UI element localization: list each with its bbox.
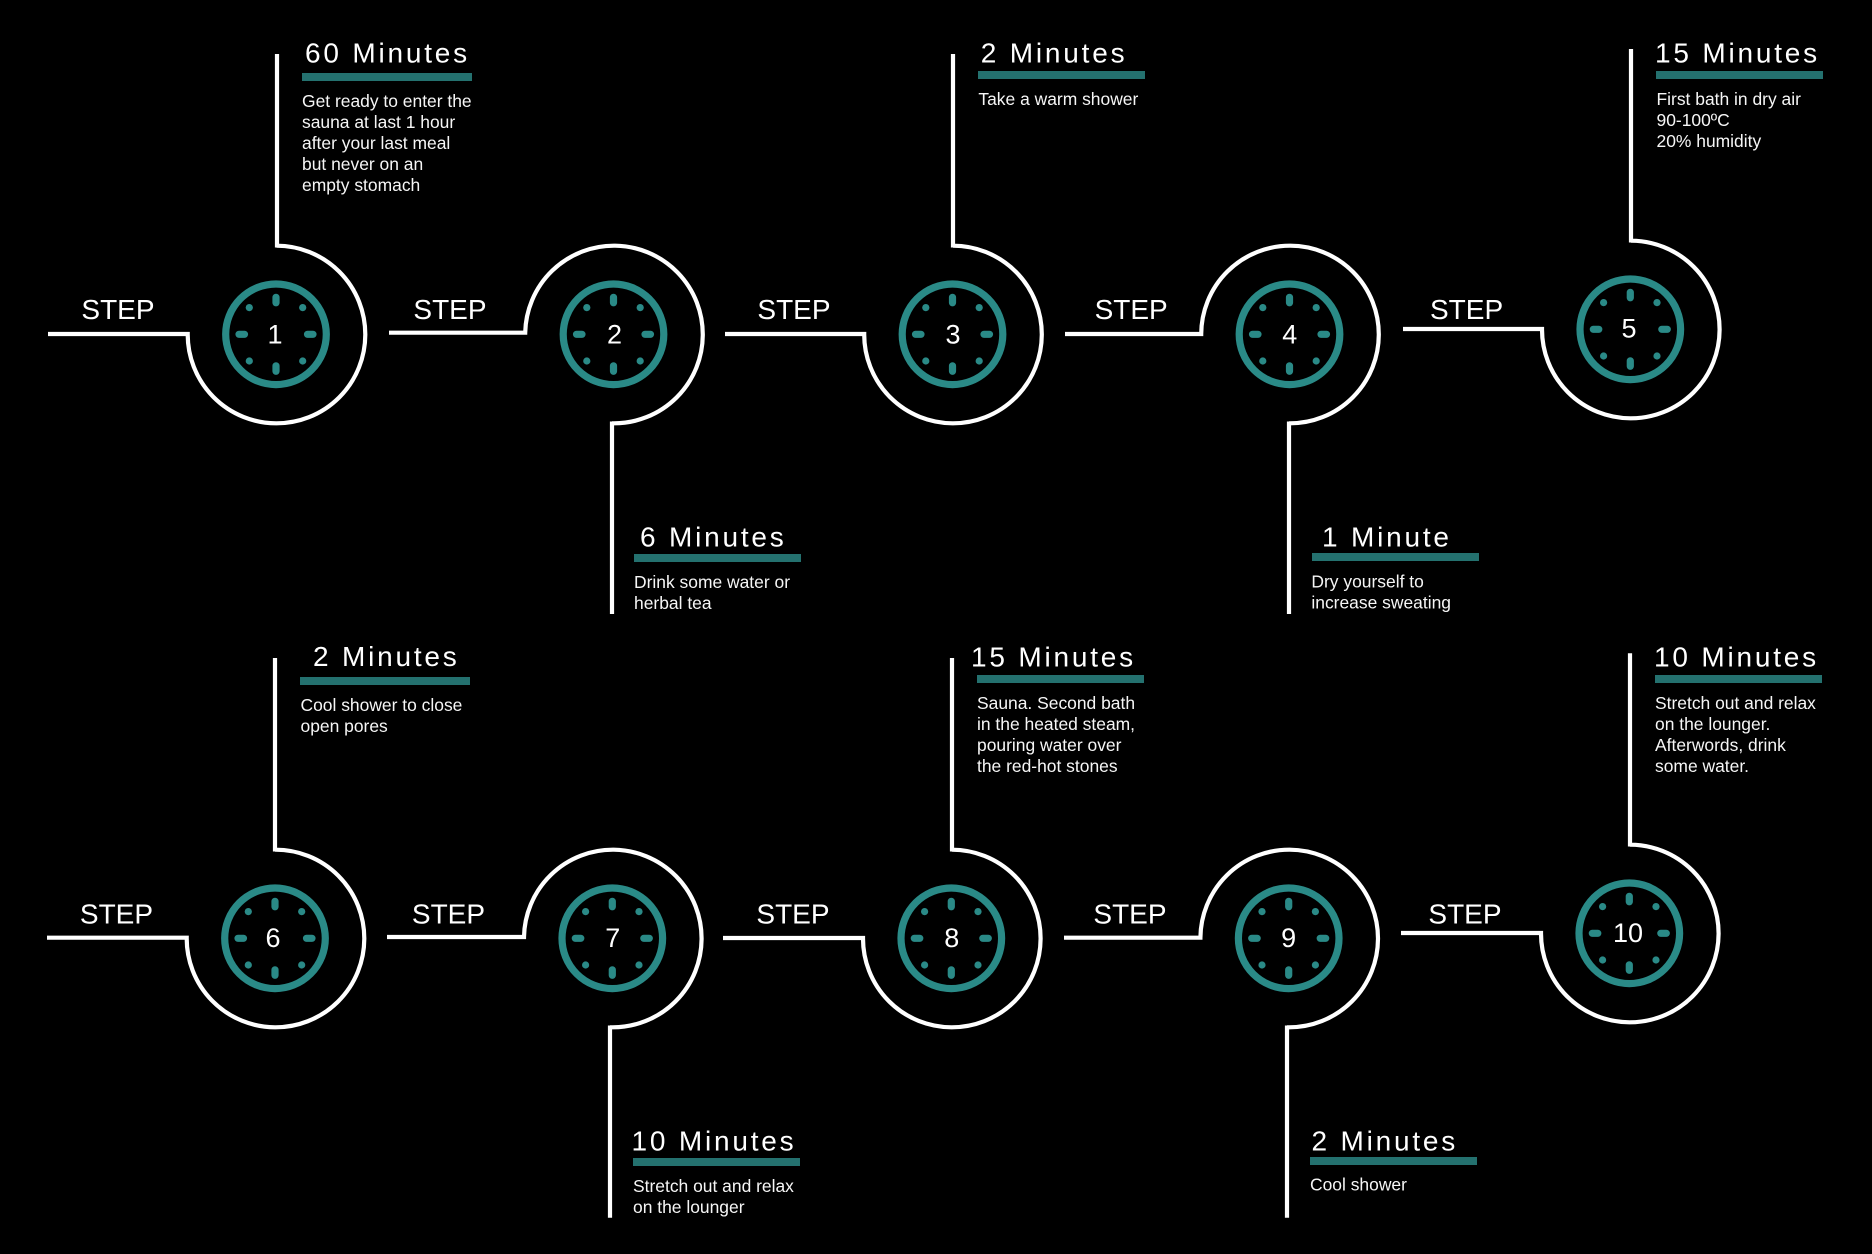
- step 8: [723, 642, 1144, 1027]
- description: Dry yourself to: [1311, 571, 1424, 591]
- connector line: [1065, 246, 1379, 614]
- icon: clock 8: [901, 888, 1002, 989]
- step 7: [387, 850, 800, 1218]
- description: Cool shower to close: [300, 695, 462, 715]
- description: Drink some water or: [634, 572, 790, 592]
- description: Get ready to enter the: [302, 91, 472, 111]
- step 6: [47, 641, 470, 1027]
- description: empty stomach: [302, 175, 420, 195]
- connector line: [723, 658, 1041, 1027]
- icon: clock 5: [1580, 279, 1681, 380]
- step 2: [389, 246, 801, 614]
- step 3: [725, 38, 1145, 423]
- description: Afterwords, drink: [1655, 735, 1786, 755]
- description: First bath in dry air: [1656, 89, 1801, 109]
- description: pouring water over: [977, 735, 1122, 755]
- step label: STEP: [413, 294, 487, 325]
- step label: STEP: [412, 898, 485, 929]
- duration heading: 15 Minutes: [1655, 38, 1820, 69]
- heading bar: [978, 71, 1145, 79]
- step 4: [1065, 246, 1479, 614]
- step 1: [48, 38, 472, 423]
- description: Stretch out and relax: [633, 1176, 794, 1196]
- description: on the lounger.: [1655, 714, 1770, 734]
- step label: STEP: [756, 898, 830, 929]
- icon: clock 7: 7: [605, 923, 620, 953]
- duration heading: 2 Minutes: [981, 38, 1127, 69]
- icon: clock 9: 9: [1281, 923, 1296, 953]
- connector line: [47, 658, 364, 1027]
- description: open pores: [300, 716, 388, 736]
- description: some water.: [1655, 756, 1749, 776]
- icon: clock 4: [1239, 284, 1340, 385]
- step label: STEP: [1430, 294, 1503, 325]
- heading bar: [1312, 553, 1479, 561]
- icon: clock 3: [902, 284, 1003, 385]
- heading bar: [300, 677, 470, 685]
- description: the red-hot stones: [977, 756, 1118, 776]
- description: 20% humidity: [1656, 131, 1761, 151]
- description: increase sweating: [1311, 592, 1451, 612]
- step label: STEP: [81, 294, 155, 325]
- icon: clock 10: [1579, 883, 1680, 984]
- step 10: [1401, 642, 1822, 1022]
- icon: clock 10: 10: [1613, 918, 1643, 948]
- duration heading: 2 Minutes: [1312, 1126, 1458, 1157]
- step 5: [1403, 38, 1823, 418]
- description: but never on an: [302, 154, 423, 174]
- connector line: [1401, 653, 1719, 1022]
- heading bar: [634, 554, 801, 562]
- icon: clock 2: 2: [607, 319, 622, 349]
- heading bar: [633, 1158, 800, 1166]
- step label: STEP: [1093, 898, 1167, 929]
- icon: clock 1: [226, 284, 326, 385]
- step label: STEP: [1095, 294, 1168, 325]
- icon: clock 6: 6: [265, 923, 281, 953]
- duration heading: 1 Minute: [1322, 522, 1452, 553]
- description: on the lounger: [633, 1197, 745, 1217]
- description: 90-100ºC: [1656, 110, 1730, 130]
- connector line: [1403, 49, 1720, 418]
- heading bar: [977, 675, 1144, 683]
- icon: clock 7: [562, 888, 663, 989]
- icon: clock 5: 5: [1621, 313, 1637, 343]
- icon: clock 9: [1238, 888, 1339, 989]
- heading bar: [1310, 1157, 1477, 1165]
- connector line: [725, 54, 1042, 423]
- icon: clock 2: [563, 284, 664, 385]
- description: in the heated steam,: [977, 714, 1135, 734]
- connector line: [1064, 850, 1378, 1218]
- step label: STEP: [1428, 898, 1502, 929]
- connector line: [48, 54, 365, 423]
- duration heading: 2 Minutes: [313, 641, 460, 672]
- connector line: [389, 246, 703, 614]
- duration heading: 6 Minutes: [640, 522, 787, 553]
- step 9: [1064, 850, 1477, 1218]
- description: sauna at last 1 hour: [302, 112, 455, 132]
- description: Cool shower: [1310, 1175, 1407, 1195]
- step label: STEP: [80, 898, 153, 929]
- description: Stretch out and relax: [1655, 693, 1816, 713]
- duration heading: 15 Minutes: [971, 642, 1136, 673]
- heading bar: [302, 73, 472, 81]
- connector line: [387, 850, 702, 1218]
- heading bar: [1655, 675, 1822, 683]
- icon: clock 1: 1: [267, 319, 283, 349]
- description: herbal tea: [634, 593, 712, 613]
- duration heading: 60 Minutes: [305, 38, 470, 69]
- icon: clock 8: 8: [944, 923, 959, 953]
- icon: clock 6: [225, 888, 325, 989]
- description: Take a warm shower: [978, 89, 1138, 109]
- icon: clock 3: 3: [945, 319, 961, 349]
- heading bar: [1656, 71, 1823, 79]
- duration heading: 10 Minutes: [1654, 642, 1819, 673]
- icon: clock 4: 4: [1282, 319, 1297, 349]
- step label: STEP: [757, 294, 831, 325]
- duration heading: 10 Minutes: [632, 1126, 796, 1157]
- description: after your last meal: [302, 133, 450, 153]
- description: Sauna. Second bath: [977, 693, 1135, 713]
